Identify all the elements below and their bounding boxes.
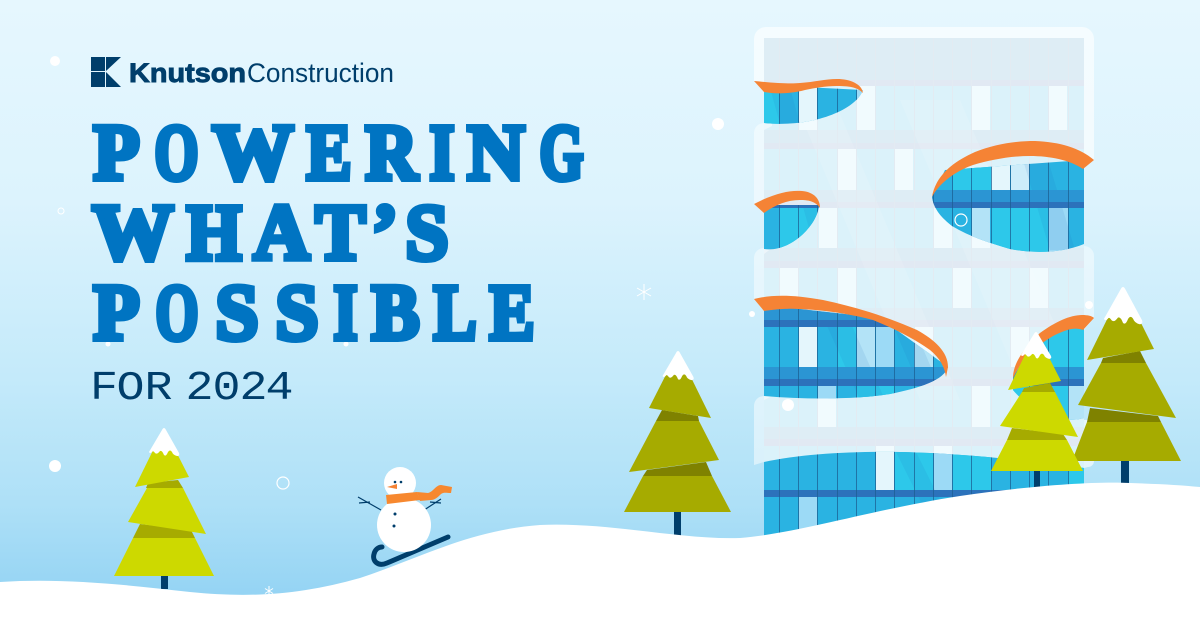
title line 3: O [156,270,198,357]
title [92,110,584,357]
title line 1: R [366,110,418,197]
frosted glass facade [764,38,1084,470]
subtitle: 2 [240,366,268,412]
title line 3: B [372,270,420,357]
snowman body [377,467,431,552]
logo [91,57,394,88]
face and buttons [392,481,402,528]
title line 1: I [430,110,454,197]
logo wordmark: Knutson [129,58,246,88]
tree: lime pine at right [991,332,1083,488]
title line 2: S [406,190,448,277]
title line 3: L [434,270,476,357]
subtitle: 2 [186,366,214,412]
title line 1: W [212,110,294,197]
blue glass windows [764,80,1084,550]
subtitle: 0 [212,366,240,412]
arms [358,497,441,514]
falling snow dots and rings [49,56,1093,489]
subtitle: F [90,366,118,412]
title line 1: O [154,110,198,197]
title line 1: N [468,110,524,197]
tree: olive pine at right [1072,287,1181,485]
snowflake [265,284,651,596]
subtitle: R [144,366,172,412]
title line 2: H [186,190,242,277]
title line 1: P [94,110,140,197]
title line 3: S [216,270,258,357]
logo wordmark: Construction [247,58,394,88]
title line 1: E [306,110,352,197]
title line 1: G [540,110,584,197]
carrot nose [387,484,397,489]
title line 2: A [254,190,310,277]
white building frame [754,27,1094,468]
title line 2: ’ [372,190,398,277]
orange window eyebrows [754,79,1094,378]
sled [374,537,448,564]
title line 3: P [94,270,140,357]
snowy hills [0,483,1200,630]
building [754,27,1094,550]
scarf [386,485,452,504]
logo mark [91,57,121,87]
subtitle: 4 [266,366,294,412]
subtitle: O [116,366,144,412]
snowman on sled [358,467,452,564]
title line 3: I [334,270,358,357]
title line 3: E [490,270,534,357]
title line 3: S [276,270,318,357]
tree: lime pine at left [114,428,214,589]
title line 2: T [316,190,366,277]
title line 2: W [92,190,174,277]
tree: olive pine in centre [624,351,731,538]
